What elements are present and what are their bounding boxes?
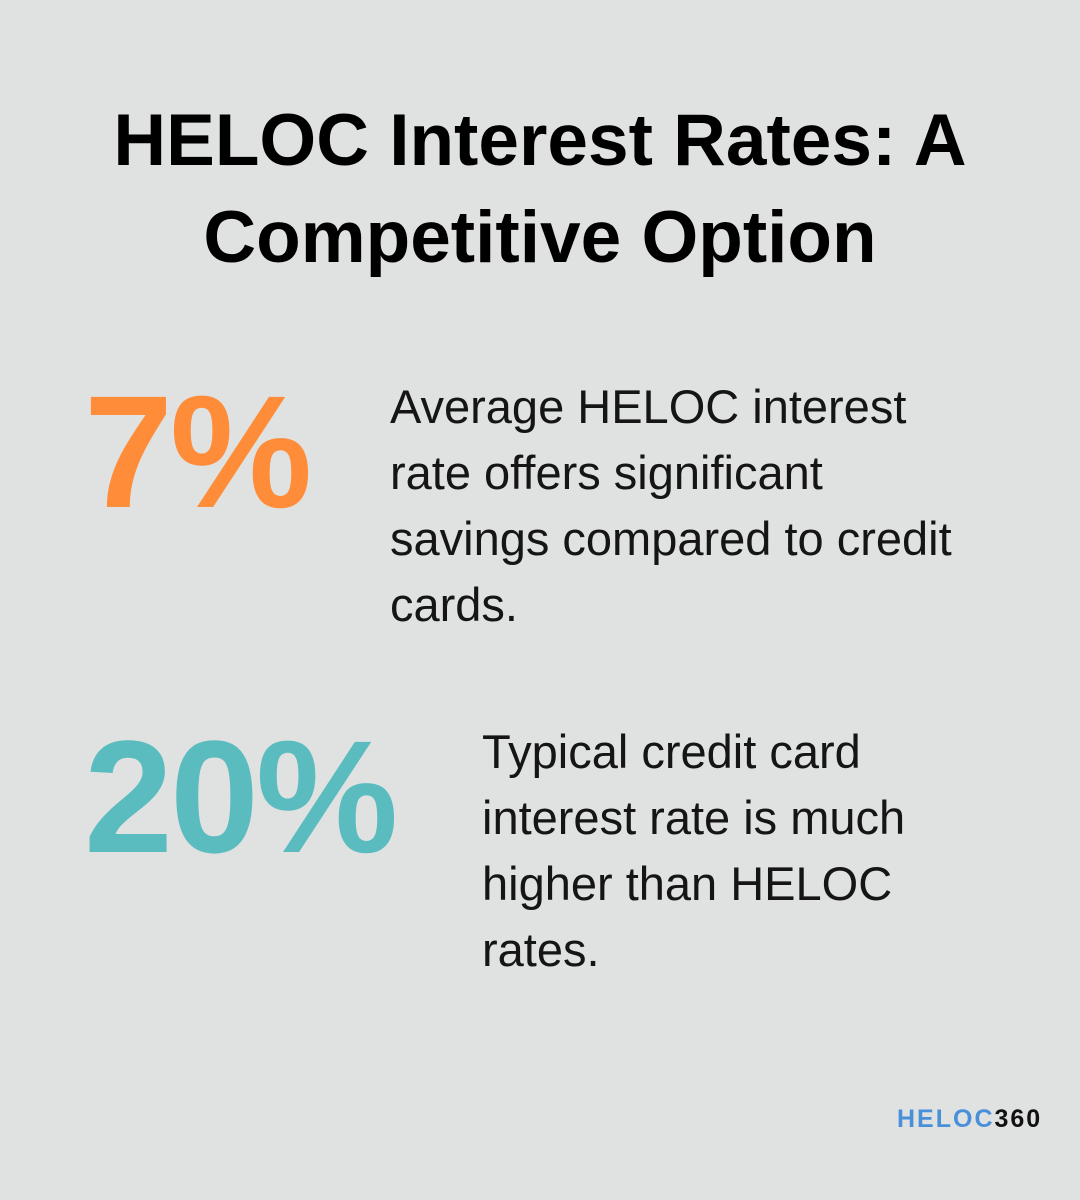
text: 7% description: rate offers significant	[390, 446, 823, 499]
text: 20% description	[482, 725, 905, 976]
text: 20% description: higher than HELOC	[482, 857, 892, 910]
logo: HELOC360: HELOC360	[897, 1105, 1042, 1133]
text: 7% description: cards.	[390, 578, 518, 631]
title: Competitive Option	[203, 197, 877, 278]
text: 20% description: Typical credit card	[482, 725, 861, 778]
stat: 20%: 20%	[84, 707, 395, 886]
text: 7% description	[390, 380, 952, 631]
text: 7% description: Average HELOC interest	[390, 380, 906, 433]
title	[113, 100, 967, 278]
title: HELOC Interest Rates: A	[113, 100, 967, 181]
stat: 7%: 7%	[84, 362, 309, 541]
text: 7% description: savings compared to credit	[390, 512, 952, 565]
text: 20% description: rates.	[482, 923, 600, 976]
text: 20% description: interest rate is much	[482, 791, 905, 844]
